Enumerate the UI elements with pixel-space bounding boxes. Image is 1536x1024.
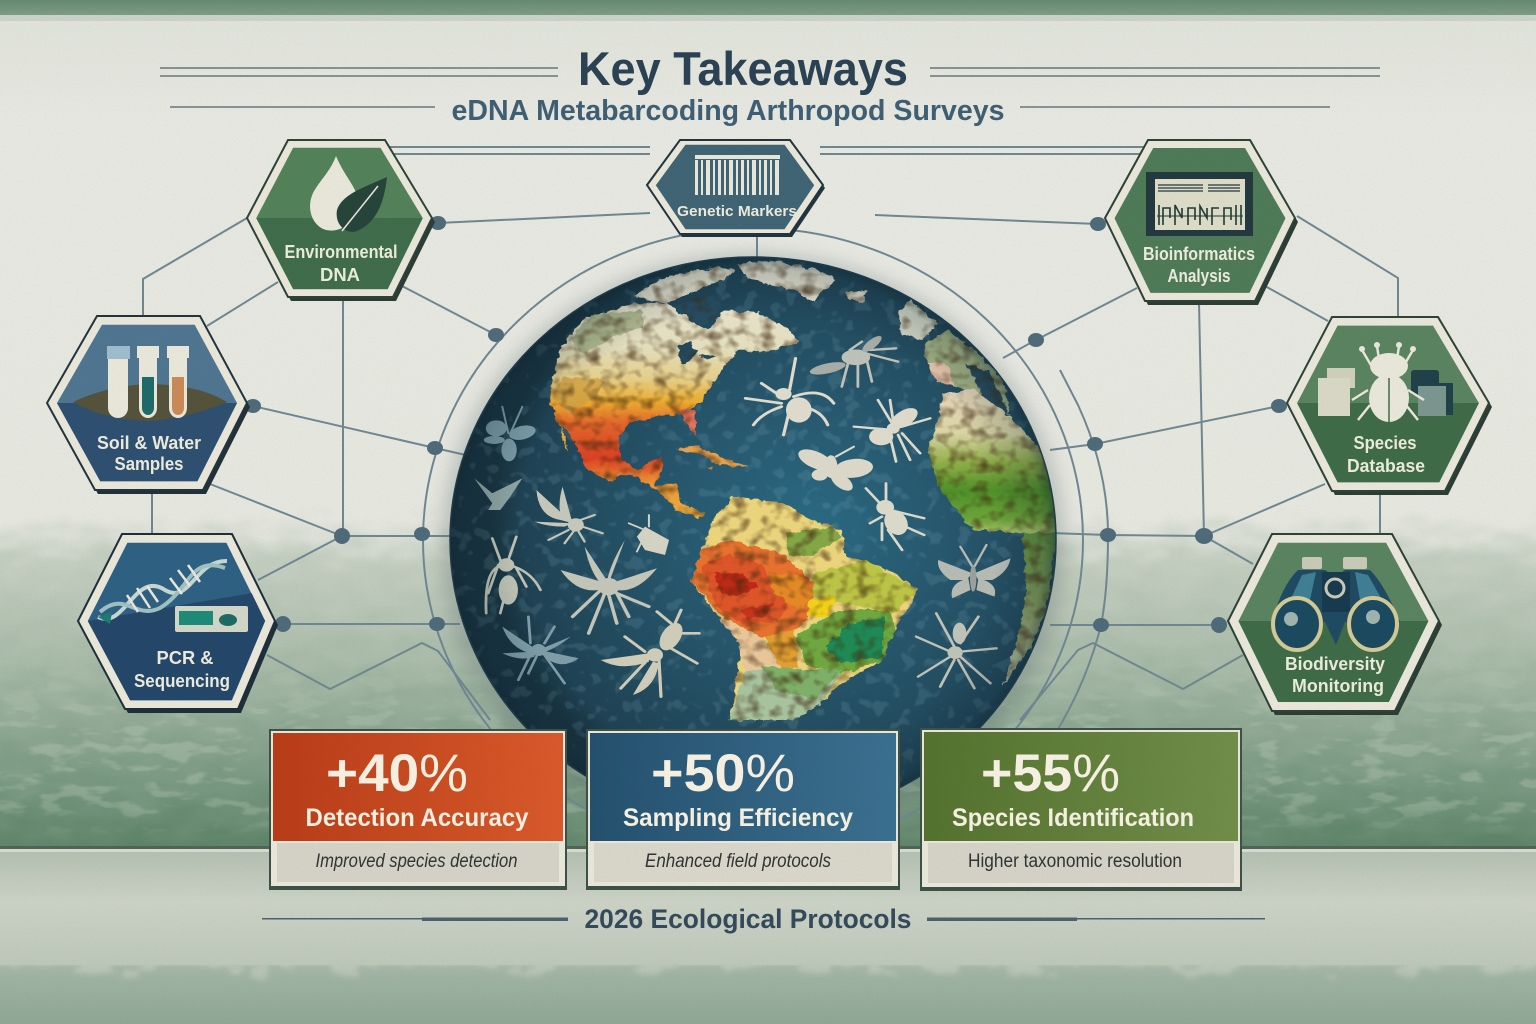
label: Biodiversity: [1285, 654, 1385, 674]
title: Key Takeaways: [578, 42, 908, 95]
label: Soil & Water: [97, 433, 201, 453]
insect: long beetle: [866, 483, 924, 550]
stat: +50%: [651, 744, 795, 803]
title rules: [160, 68, 1380, 107]
panel: Genetic Markers hexagon: [647, 140, 825, 237]
insect: pale spider: [486, 537, 540, 613]
insect: large six-winged: [561, 540, 657, 633]
insect: leaf beetle: [629, 515, 669, 555]
land masses: [548, 260, 1057, 720]
insect: cream flyer: [601, 610, 699, 697]
label: Species: [1354, 433, 1416, 453]
panel: Bioinformatics Analysis hexagon: [1105, 140, 1298, 305]
panel: Biodiversity Monitoring hexagon: [1228, 534, 1442, 715]
label: Genetic Markers: [677, 203, 797, 220]
card: Species Identification: [920, 728, 1242, 891]
icon: sequence monitor: [1146, 172, 1253, 236]
panel: Species Database hexagon: Database: [1347, 456, 1425, 476]
subtitle: eDNA Metabarcoding Arthropod Surveys: [452, 95, 1004, 127]
arthropod silhouettes: [474, 334, 1011, 697]
stat: +40%: [326, 744, 468, 803]
panel: PCR and Sequencing hexagon: [78, 534, 278, 713]
insect: fly: [808, 334, 898, 387]
insect: spider: [745, 358, 834, 435]
card: Detection Accuracy: Improved species detection: [316, 851, 518, 872]
panel: Soil and Water Samples hexagon: Samples: [114, 454, 184, 474]
panel: Soil and Water Samples hexagon: [47, 316, 250, 494]
panel: Environmental DNA hexagon: [247, 140, 435, 301]
network connector lines: [143, 147, 1398, 852]
insect: winged bug: [854, 400, 930, 462]
card: Detection Accuracy: [269, 729, 567, 890]
network nodes: [245, 216, 1287, 633]
card: Detection Accuracy: Detection Accuracy: [306, 804, 529, 832]
label: PCR &: [156, 648, 214, 668]
panel: PCR and Sequencing hexagon: Sequencing: [134, 671, 230, 691]
card: Species Identification: Species Identification: [952, 804, 1194, 832]
footer text: 2026 Ecological Protocols: [584, 904, 912, 934]
icon: DNA helix and sequencer: [98, 561, 248, 632]
insect: grey butterfly: [938, 545, 1011, 598]
icon: water drop and leaf: [310, 156, 387, 232]
panel: Bioinformatics Analysis hexagon: Analysis: [1168, 266, 1230, 286]
icon: barcode: [695, 155, 780, 195]
globe: [441, 253, 1065, 837]
label: Environmental: [284, 242, 398, 262]
card: Sampling Efficiency: [586, 729, 900, 890]
icon: binoculars: [1272, 557, 1400, 650]
insect: wasp: [534, 487, 603, 543]
insect: blue butterfly: [484, 407, 538, 461]
icon: beetle and folders: [1318, 342, 1453, 422]
insect: grey spider: [916, 613, 996, 688]
panel: Biodiversity Monitoring hexagon: Monitoring: [1292, 676, 1384, 696]
panel: Species Database hexagon: [1287, 317, 1492, 495]
panel: Environmental DNA hexagon: DNA: [320, 265, 360, 285]
label: Bioinformatics: [1143, 244, 1255, 264]
insect: butterfly small: [474, 478, 522, 510]
insect: moth: [798, 446, 873, 491]
card: Species Identification: Higher taxonomic resolution: [968, 851, 1182, 872]
stat: +55%: [981, 744, 1120, 803]
icon: test tubes on soil: [73, 346, 227, 421]
insect: blue wasp: [502, 617, 579, 683]
card: Sampling Efficiency: Sampling Efficiency: [623, 804, 853, 832]
card: Sampling Efficiency: Enhanced field protocols: [645, 851, 831, 872]
footer rules: [262, 918, 1265, 921]
